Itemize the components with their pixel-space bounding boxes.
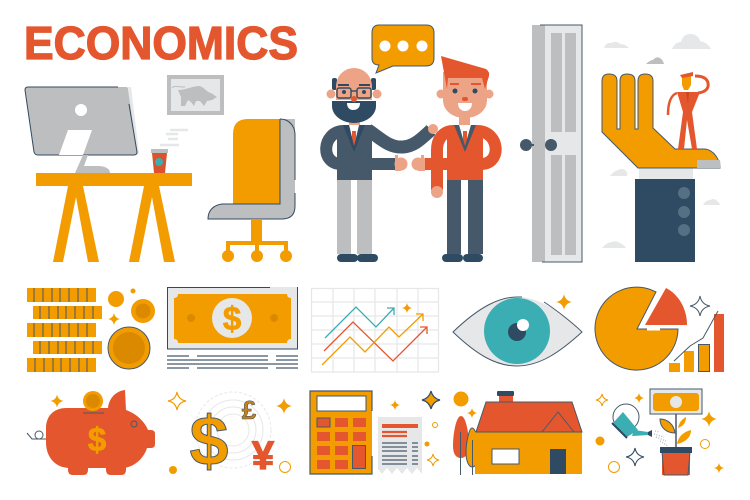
nose	[351, 96, 357, 102]
hands	[394, 124, 438, 171]
bill	[650, 389, 702, 414]
orange line	[322, 314, 423, 365]
sparkles	[168, 392, 186, 410]
rings	[195, 392, 271, 468]
icon: framed bull picture	[167, 75, 224, 115]
icon: money plant	[650, 389, 702, 475]
icon: door	[520, 25, 582, 262]
arms	[425, 131, 496, 190]
torso	[447, 125, 483, 180]
neck	[459, 115, 470, 129]
eyes	[338, 85, 370, 94]
head	[443, 72, 487, 118]
mouth	[347, 103, 360, 110]
icon: trees	[453, 416, 479, 475]
glasses	[337, 88, 371, 98]
ears	[326, 90, 382, 98]
figure: small man on hand	[668, 72, 708, 149]
desk top	[36, 173, 192, 186]
line chart	[311, 288, 439, 372]
icon: loose coins	[108, 288, 155, 369]
bar chart	[669, 296, 724, 372]
dollar: $	[190, 402, 228, 480]
title: ECONOMICS	[24, 17, 298, 69]
icon: house	[475, 391, 582, 474]
ears	[436, 90, 494, 98]
shoes	[337, 254, 378, 262]
callout: speech bubble	[372, 25, 434, 73]
icon: dollar bill: $	[223, 300, 241, 337]
pie chart	[595, 287, 687, 370]
red line	[324, 322, 427, 361]
shirt and tie	[343, 125, 365, 152]
figure: bald bearded man	[326, 68, 438, 262]
icon: sun and sparkle	[454, 392, 477, 418]
icon: calculator sparkles	[390, 391, 440, 466]
icon: piggy bank: $	[88, 421, 106, 458]
arm down	[326, 131, 396, 164]
monitor	[25, 87, 139, 173]
icon: plant sparkles	[596, 393, 724, 473]
neck	[349, 115, 360, 129]
beard	[332, 101, 376, 123]
hair	[441, 56, 489, 89]
legs	[447, 180, 483, 254]
suit torso	[337, 125, 372, 180]
coffee cup	[151, 130, 188, 173]
pound: £	[242, 395, 257, 425]
icon: eye	[453, 294, 582, 366]
icon: coin stacks	[27, 288, 102, 372]
icon: watering can	[612, 404, 668, 446]
face	[450, 84, 481, 111]
figure: red-haired man	[412, 56, 496, 262]
icon: giant hand	[602, 74, 721, 168]
head	[336, 68, 372, 100]
yen: ¥	[252, 434, 275, 478]
sparkle	[402, 303, 412, 313]
icon: currency symbols	[168, 392, 292, 480]
stem	[675, 414, 677, 447]
arm on shoulder	[368, 130, 431, 147]
icon: calculator	[310, 391, 372, 474]
legs	[337, 180, 372, 254]
grid	[311, 288, 439, 372]
teal line	[325, 307, 394, 338]
icon: piggy bank	[27, 390, 155, 475]
gaps	[444, 140, 487, 158]
desk legs	[53, 186, 175, 262]
leaves	[660, 419, 675, 433]
icon: computer desk	[25, 87, 192, 262]
pot	[662, 452, 690, 475]
icon: office chair	[208, 119, 295, 262]
icon: receipt	[378, 417, 422, 474]
cuff and hand	[412, 155, 443, 198]
icon: clouds	[602, 34, 720, 248]
shirt and tie	[454, 125, 476, 152]
icon: dollar bill	[167, 287, 298, 368]
icon: sleeve and cuff	[635, 168, 695, 262]
shoes	[442, 254, 483, 262]
hair sides	[332, 78, 376, 90]
